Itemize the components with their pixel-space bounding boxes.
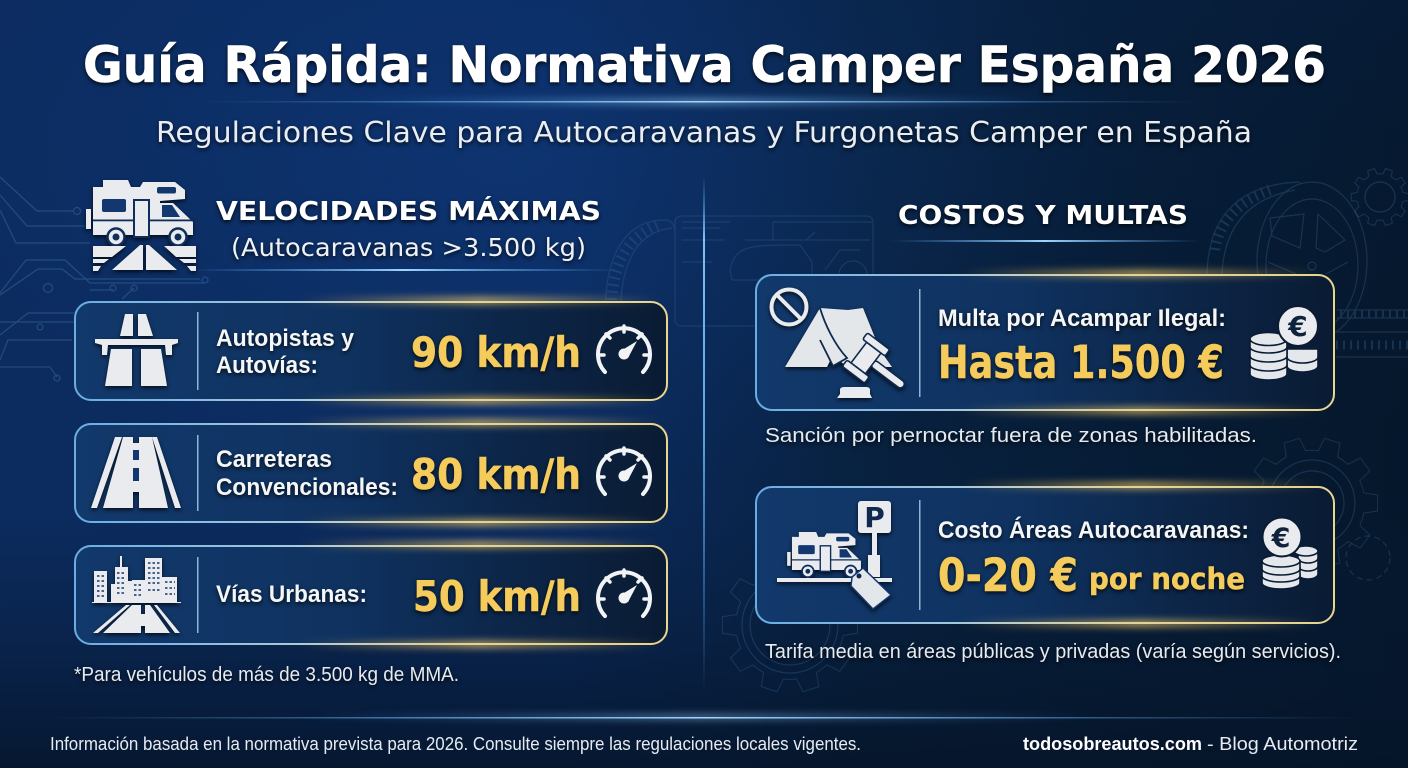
icon: motorway (95, 314, 178, 386)
icon: gauge (598, 326, 650, 372)
icon: coins (1250, 306, 1318, 380)
panel: vias urbanas (75, 542, 667, 647)
icon: gauge (598, 448, 650, 494)
icon: coins (1262, 518, 1318, 589)
icon: road (91, 437, 181, 508)
background gear top right (1351, 167, 1408, 227)
panel: carreteras (75, 420, 667, 525)
value: 90 km/h: 90 km/h (411, 328, 581, 377)
footer line (50, 715, 1360, 719)
title: Guía Rápida: Normativa Camper España 2026 (83, 36, 1326, 94)
background gear bottom right (1246, 434, 1390, 580)
icon: forbidden tent and gavel (772, 290, 916, 403)
value suffix: por noche: por noche (1089, 562, 1245, 596)
icon: coins: € (1287, 310, 1308, 343)
icon: city road (92, 556, 181, 633)
footer credit (1023, 734, 1358, 754)
label: multa: Multa por Acampar Ilegal: (938, 305, 1226, 332)
label: carreteras (216, 446, 398, 501)
background blueprint and tire centre (605, 216, 873, 326)
title underline (200, 99, 1200, 104)
label: carreteras: Carreteras (216, 446, 332, 473)
heading: costos y multas: COSTOS Y MULTAS (898, 201, 1188, 231)
panel: multa (756, 271, 1334, 413)
icon: coins: € (1271, 523, 1290, 554)
value: hasta 1.500 euros: Hasta 1.500 € (938, 336, 1224, 389)
background gear bottom left (722, 554, 858, 696)
panel: autopistas (75, 298, 667, 403)
icon: camper on road (86, 180, 196, 271)
heading underline left (190, 269, 620, 271)
label: autopistas: Autopistas y (216, 325, 355, 352)
background tire right (1207, 182, 1408, 357)
central divider (703, 176, 705, 694)
value: 0-20 euros: 0-20 € (938, 549, 1078, 602)
label: autopistas (216, 325, 355, 379)
footnote: *Para vehículos de más de 3.500 kg de MMA. (74, 664, 459, 686)
icon: gauge (598, 570, 650, 616)
icon: camper parking and tag (777, 501, 892, 609)
heading underline right (890, 240, 1200, 242)
heading: velocidades: (Autocaravanas >3.500 kg) (231, 233, 586, 262)
footer credit: todosobreautos.com (1023, 734, 1202, 754)
value: 80 km/h: 80 km/h (411, 450, 581, 499)
label: areas: Costo Áreas Autocaravanas: (938, 516, 1249, 544)
note: areas: Tarifa media en áreas públicas y privadas (varía según servicios). (765, 641, 1341, 663)
label: carreteras: Convencionales: (216, 474, 398, 501)
label: autopistas: Autovías: (216, 352, 318, 379)
footer disclaimer: Información basada en la normativa prevista para 2026. Consulte siempre las regulaciones locales vigentes. (50, 734, 861, 754)
background circuit pattern (0, 177, 208, 381)
value: 50 km/h: 50 km/h (413, 572, 581, 621)
heading: velocidades: VELOCIDADES MÁXIMAS (216, 195, 601, 227)
footer credit: - Blog Automotriz (1207, 734, 1358, 754)
heading: velocidades (216, 195, 601, 262)
panel: areas (756, 483, 1334, 626)
subtitle: Regulaciones Clave para Autocaravanas y Furgonetas Camper en España (156, 116, 1252, 149)
label: vias urbanas: Vías Urbanas: (216, 581, 367, 608)
note: multa: Sanción por pernoctar fuera de zonas habilitadas. (765, 425, 1257, 447)
icon: camper parking and tag: P (864, 501, 885, 534)
